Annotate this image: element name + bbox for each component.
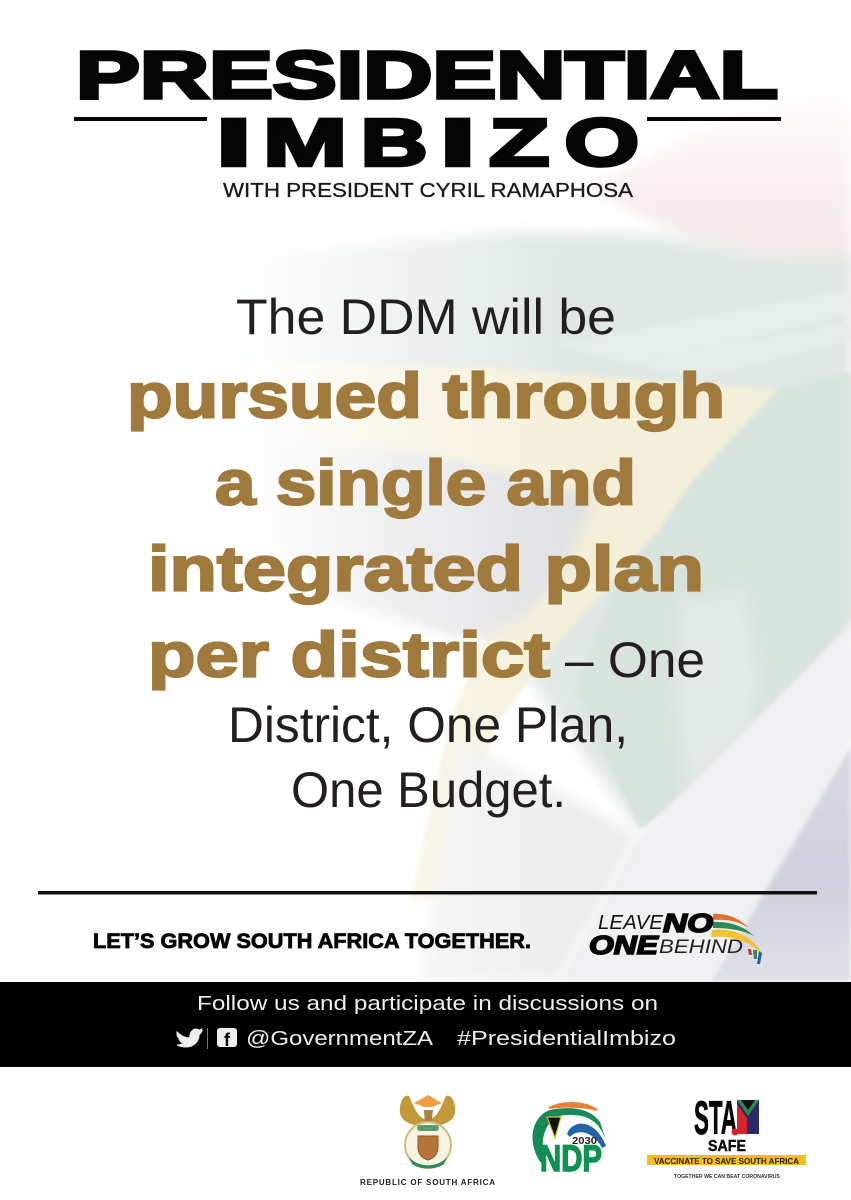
highlight line 4: per district: [148, 620, 550, 690]
logo: Leave No One Behind: [589, 908, 764, 964]
motto ribbon: [409, 1157, 447, 1168]
title line: IMBIZO: [216, 106, 639, 180]
green ring: [532, 1108, 606, 1163]
heart: [732, 1128, 738, 1136]
logo word ONE: ONE: [589, 930, 659, 960]
title line: PRESIDENTIAL: PRESIDENTIAL: [76, 38, 778, 113]
title rule right: [647, 117, 781, 121]
subtitle: WITH PRESIDENT CYRIL RAMAPHOSA: [223, 180, 634, 202]
rainbow swoosh: [711, 914, 764, 957]
icon separator: [207, 1028, 208, 1049]
title line: IMBIZO: I: [440, 106, 475, 180]
handle: @GovernmentZA: [246, 1028, 434, 1050]
shield: [418, 1136, 438, 1160]
statement tail: One: – One: [565, 632, 705, 688]
tagline: TOGETHER WE CAN BEAT CORONAVIRUS: [674, 1174, 780, 1180]
outer orange arc: [549, 1103, 597, 1110]
swoosh ends: [748, 949, 762, 964]
icon: facebook: [217, 1028, 237, 1050]
title line: IMBIZO: O: [564, 106, 639, 180]
crossbar green: [417, 1125, 439, 1131]
flag Y: [737, 1100, 759, 1134]
slogan: LET’S GROW SOUTH AFRICA TOGETHER.: [93, 930, 531, 953]
label: Republic of South Africa: REPUBLIC OF SOUTH AFRICA: [360, 1178, 495, 1187]
title line: IMBIZO: I: [216, 106, 251, 180]
footer panel: [0, 1067, 851, 1200]
highlight line 3: integrated plan: [148, 534, 704, 604]
sun: [414, 1095, 442, 1107]
main statement: [127, 289, 725, 818]
vaccinate banner: [647, 1155, 806, 1165]
highlighted text in gold: [127, 362, 725, 690]
logo: coat of arms: [400, 1095, 455, 1168]
divider rule: [38, 891, 817, 894]
eagle body: [424, 1110, 433, 1126]
statement line 6: District, One Plan,: [228, 697, 628, 753]
title rule left: [74, 117, 207, 121]
icon: twitter: [177, 1029, 202, 1047]
title line: IMBIZO: Z: [489, 106, 549, 180]
hashtag: #PresidentialImbizo: [457, 1028, 676, 1050]
logo: Stay Safe: STA: [694, 1091, 737, 1144]
highlight line 2: a single and: [215, 448, 636, 518]
2030: 2030: [572, 1135, 597, 1147]
logo: Stay Safe: [647, 1091, 806, 1180]
statement line 1: The DDM will be: [236, 289, 616, 345]
vaccinate text: VACCINATE TO SAVE SOUTH AFRICA: [654, 1156, 799, 1166]
NDP wordmark: NDP: [540, 1138, 602, 1179]
SAFE: SAFE: [708, 1138, 746, 1155]
shield ring: [405, 1122, 451, 1168]
title line: IMBIZO: M: [263, 106, 347, 180]
blue sweep: [567, 1124, 606, 1148]
logo word NO: NO: [663, 908, 713, 938]
social media band: [0, 982, 851, 1067]
title line: IMBIZO: B: [361, 106, 428, 180]
highlight line 1: pursued through: [127, 362, 725, 432]
call to action: Follow us and participate in discussions on: [197, 993, 658, 1015]
statement line 7: One Budget.: [291, 762, 566, 818]
logo word BEHIND: BEHIND: [659, 937, 743, 958]
black triangle: [547, 1117, 561, 1138]
logo word LEAVE: LEAVE: [598, 912, 664, 934]
logo: NDP 2030: [532, 1103, 606, 1179]
title: Presidential Imbizo: [74, 38, 781, 180]
facebook f glyph: f: [224, 1030, 231, 1050]
wings: [400, 1096, 455, 1126]
